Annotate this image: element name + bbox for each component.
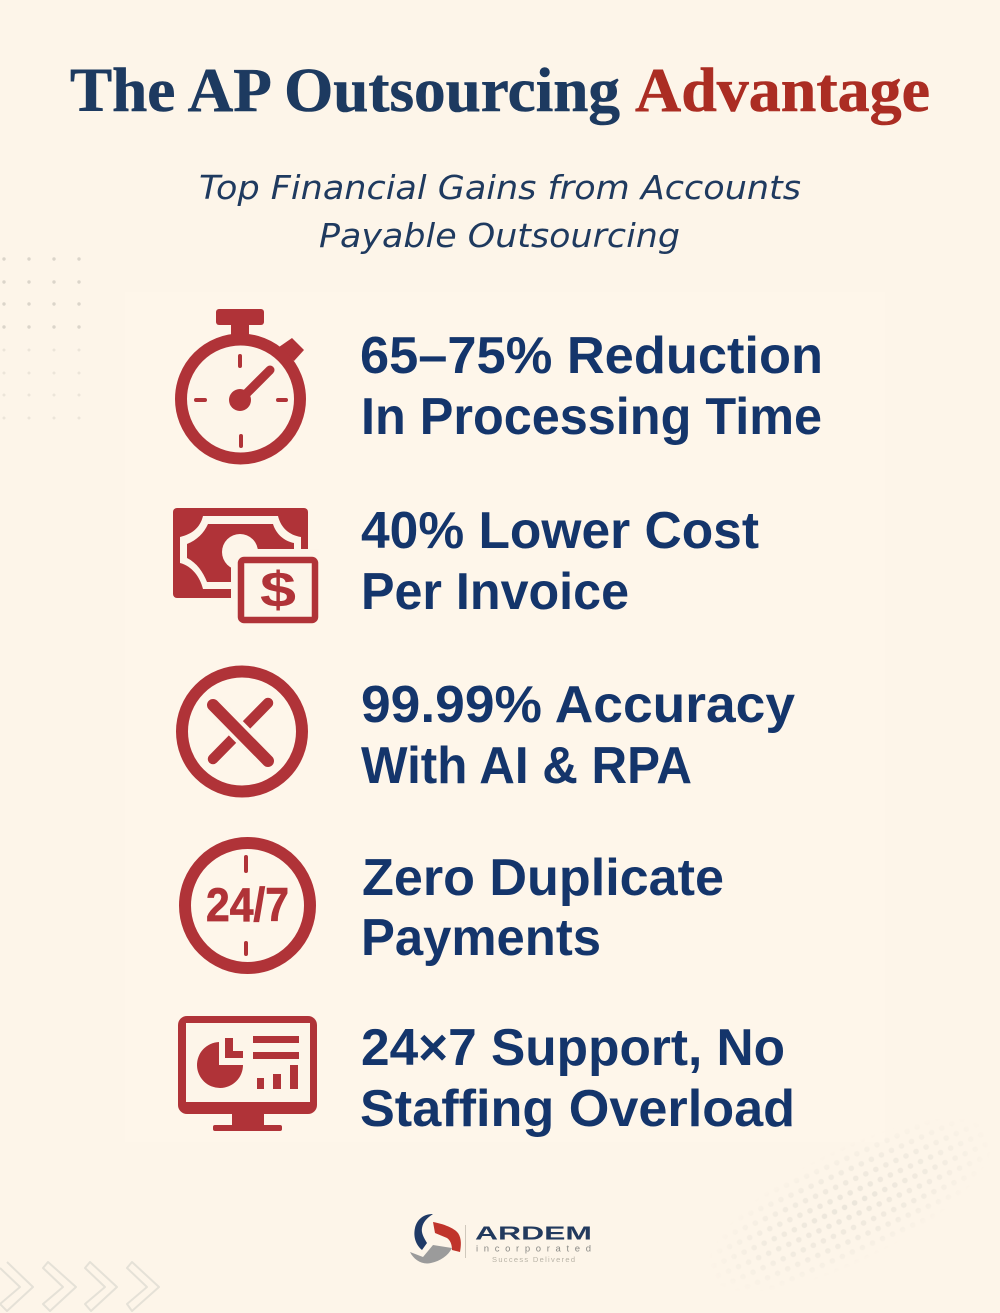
icon: crossed circle [182,672,302,792]
benefit: duplicate payments [361,849,724,967]
benefit: processing time: 65–75% Reduction [360,327,823,385]
logo: ARDEM Incorporated [410,1214,592,1264]
icon: cash and dollar [173,508,319,620]
icon: 24/7 clock: 24/7 [206,878,289,931]
icon: cash and dollar: $ [260,562,296,618]
benefit: processing time [360,327,823,446]
logo: ARDEM Incorporated: incorporated [476,1244,591,1254]
subtitle [199,168,801,255]
title: Advantage [635,57,930,125]
logo: ARDEM Incorporated: Success Delivered [492,1255,575,1264]
benefit: lower cost: Per Invoice [361,563,629,621]
subtitle: Top Financial Gains from Accounts [199,168,801,207]
icon: stopwatch [181,309,304,458]
benefit: support: 24×7 Support, No [361,1019,785,1077]
benefit: support [360,1019,795,1138]
benefit: lower cost: 40% Lower Cost [361,502,759,560]
decoration: dot grid [2,257,81,420]
subtitle: Payable Outsourcing [319,216,680,255]
benefit: support: Staffing Overload [360,1080,795,1138]
title [70,57,930,125]
decoration: halftone wave [752,1145,948,1265]
benefit: accuracy: 99.99% Accuracy [361,676,795,734]
benefit list text [360,327,823,1138]
icon: monitor dashboard [178,1016,317,1131]
benefit: accuracy: With AI & RPA [361,737,692,795]
logo mark [410,1214,461,1263]
decoration: chevrons [0,1262,159,1311]
benefit: processing time: In Processing Time [361,388,822,446]
benefit: lower cost [361,502,759,621]
benefit: accuracy [361,676,795,795]
benefit: duplicate payments: Zero Duplicate [362,849,724,907]
panel: soft content backdrop [125,292,885,1142]
logo wordmark: ARDEM [475,1224,592,1244]
benefit: duplicate payments: Payments [361,909,601,967]
title: The AP Outsourcing [70,57,620,125]
icon: 24/7 clock [185,843,310,968]
